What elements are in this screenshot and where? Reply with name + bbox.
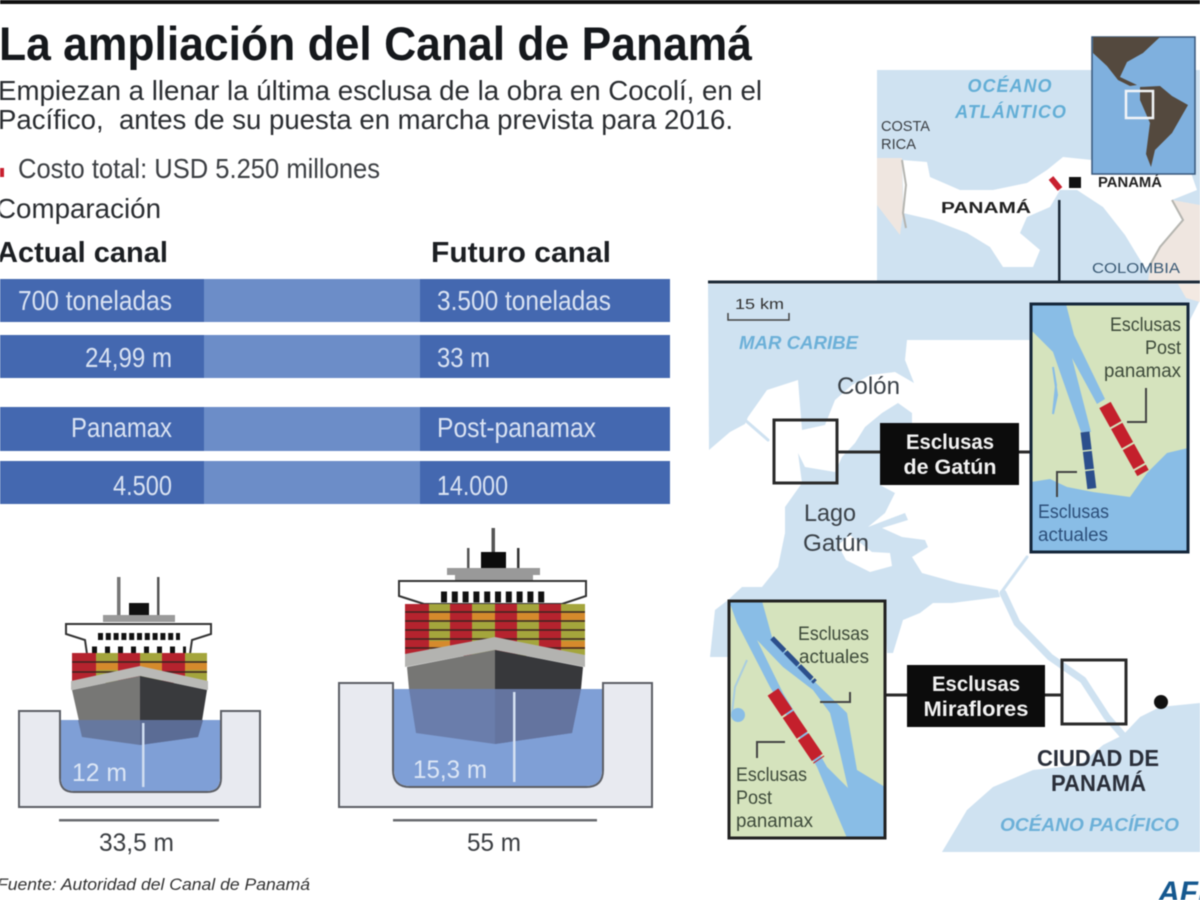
label: current locks: Esclusas xyxy=(798,624,869,645)
canal xyxy=(745,420,1127,740)
bay xyxy=(1031,448,1188,552)
label: Atlantic Ocean: OCÉANO xyxy=(967,75,1053,96)
canal marker xyxy=(1051,178,1060,189)
label: post-panamax locks: Esclusas xyxy=(1110,315,1181,336)
subtitle: Empiezan a llenar la última esclusa de la obra en Cocolí, en el xyxy=(0,75,762,106)
label: post-panamax locks: panamax xyxy=(736,811,813,832)
row: ship class: Post-panamax xyxy=(437,412,596,443)
connector xyxy=(885,694,1062,696)
label: Panama City: CIUDAD DE xyxy=(1037,745,1159,771)
label box: Esclusas xyxy=(906,431,994,454)
depth label: 12 m xyxy=(72,759,127,787)
label: Panama: PANAMÁ xyxy=(941,198,1032,217)
borders xyxy=(902,160,1183,265)
lake island xyxy=(838,535,892,572)
label: Costa Rica: COSTA xyxy=(881,118,930,135)
column heading: future canal: Futuro canal xyxy=(431,237,611,269)
channel island xyxy=(757,640,848,788)
locator square xyxy=(1062,660,1126,724)
marker: Panama City xyxy=(1154,695,1168,709)
channel water xyxy=(1031,304,1105,432)
detail inset xyxy=(729,601,885,838)
sea xyxy=(877,70,1200,282)
post-panamax locks xyxy=(773,692,819,760)
label: post-panamax locks: Post xyxy=(736,788,773,809)
locator square xyxy=(1126,91,1153,118)
water xyxy=(394,689,602,786)
Panama land xyxy=(902,157,1197,268)
post-panamax locks xyxy=(1105,405,1143,473)
label box: Esclusas xyxy=(932,673,1020,696)
total cost: Costo total: USD 5.250 millones xyxy=(18,153,380,184)
label box xyxy=(880,423,1019,485)
inset: Americas globe xyxy=(1092,37,1195,174)
label: Atlantic Ocean xyxy=(954,75,1067,122)
label: Panama City: PANAMÁ xyxy=(1051,769,1146,796)
callout: Gatún locks xyxy=(774,304,1188,552)
connector xyxy=(837,450,1031,454)
containers xyxy=(405,604,585,656)
label box: de Gatún xyxy=(904,456,996,479)
Caribbean Sea xyxy=(708,284,1200,450)
row: tonnage xyxy=(0,279,670,322)
title: La ampliación del Canal de Panamá xyxy=(0,17,753,70)
North America xyxy=(1093,37,1160,86)
neighbouring land xyxy=(877,158,903,235)
label: Costa Rica xyxy=(881,118,930,153)
column heading: current canal: Actual canal xyxy=(0,237,168,269)
row: tonnage: 3.500 toneladas xyxy=(437,285,611,316)
row: beam: 33 m xyxy=(437,342,490,373)
source note: Fuente: Autoridad del Canal de Panamá xyxy=(0,875,310,894)
leader lines xyxy=(757,692,850,758)
pale Colombia corner xyxy=(1178,284,1200,302)
label: post-panamax locks: Post xyxy=(1145,338,1182,359)
connector: locator to main map xyxy=(708,200,1200,284)
label: current locks xyxy=(798,624,869,668)
label: post-panamax locks xyxy=(1104,315,1182,382)
row: beam xyxy=(0,335,670,378)
label: post-panamax locks: Esclusas xyxy=(736,765,807,786)
leader lines xyxy=(1057,388,1146,497)
label: post-panamax locks: panamax xyxy=(1104,361,1181,382)
ship superstructure xyxy=(66,577,211,654)
South America xyxy=(1140,86,1188,167)
label: current locks xyxy=(1038,502,1109,546)
row: containers xyxy=(0,461,670,504)
diagram: post-panamax ship in future lock xyxy=(339,528,652,857)
hull xyxy=(405,637,585,689)
subtitle xyxy=(0,75,762,135)
scale bar: 15 km xyxy=(735,296,784,313)
capital marker xyxy=(1069,177,1081,188)
containers xyxy=(72,653,207,683)
label: Lake Gatún: Gatún xyxy=(803,530,869,557)
water xyxy=(61,720,220,791)
depth label: 15,3 m xyxy=(413,756,487,784)
main map: canal area xyxy=(708,284,1200,852)
width measure: 33,5 m xyxy=(99,829,174,857)
row: tonnage: 700 toneladas xyxy=(18,285,172,316)
west lake arm xyxy=(710,600,728,657)
land xyxy=(708,284,1200,852)
label: Lake Gatún: Lago xyxy=(804,500,856,527)
label box: Miraflores xyxy=(924,698,1028,721)
width measure: 55 m xyxy=(467,829,521,857)
hull xyxy=(71,666,208,721)
diagram: panamax ship in current lock xyxy=(19,577,260,857)
side stream xyxy=(732,660,747,713)
current locks xyxy=(772,638,815,682)
lock basin xyxy=(339,683,652,807)
locator square xyxy=(774,420,837,483)
label: Colón: Colón xyxy=(837,373,900,400)
row: containers: 4.500 xyxy=(113,470,172,501)
label: post-panamax locks xyxy=(736,765,813,832)
row: ship class xyxy=(0,407,670,451)
current locks xyxy=(1085,432,1092,490)
label: Lake Gatún xyxy=(803,500,869,557)
callout: Miraflores locks xyxy=(729,601,1126,838)
channel water xyxy=(729,601,885,838)
row: containers: 14.000 xyxy=(437,470,508,501)
row: beam: 24,99 m xyxy=(85,342,172,373)
comparison heading: Comparación xyxy=(0,193,161,224)
label: Atlantic Ocean: ATLÁNTICO xyxy=(954,101,1067,122)
subtitle: Pacífico, antes de su puesta en marcha prevista para 2016. xyxy=(0,104,733,135)
label: current locks: Esclusas xyxy=(1038,502,1109,523)
comparison table xyxy=(0,279,670,504)
label: Caribbean Sea: MAR CARIBE xyxy=(739,333,859,353)
row: ship class: Panamax xyxy=(71,412,172,443)
label: Colombia: COLOMBIA xyxy=(1092,260,1180,277)
ship superstructure xyxy=(399,528,586,604)
label: Panama city: PANAMÁ xyxy=(1098,174,1162,191)
label: Pacific Ocean: OCÉANO PACÍFICO xyxy=(1000,814,1179,835)
label: Panama City xyxy=(1037,745,1159,796)
locator map: Panama xyxy=(877,70,1200,282)
Lake Gatún xyxy=(728,403,1000,653)
detail inset xyxy=(1031,304,1188,552)
label: Costa Rica: RICA xyxy=(881,136,916,153)
scale bar xyxy=(728,296,789,320)
label: current locks: actuales xyxy=(1038,525,1108,546)
Pacific Ocean xyxy=(942,703,1200,852)
lock basin xyxy=(19,711,260,807)
label box xyxy=(907,665,1045,727)
label: current locks: actuales xyxy=(799,647,869,668)
